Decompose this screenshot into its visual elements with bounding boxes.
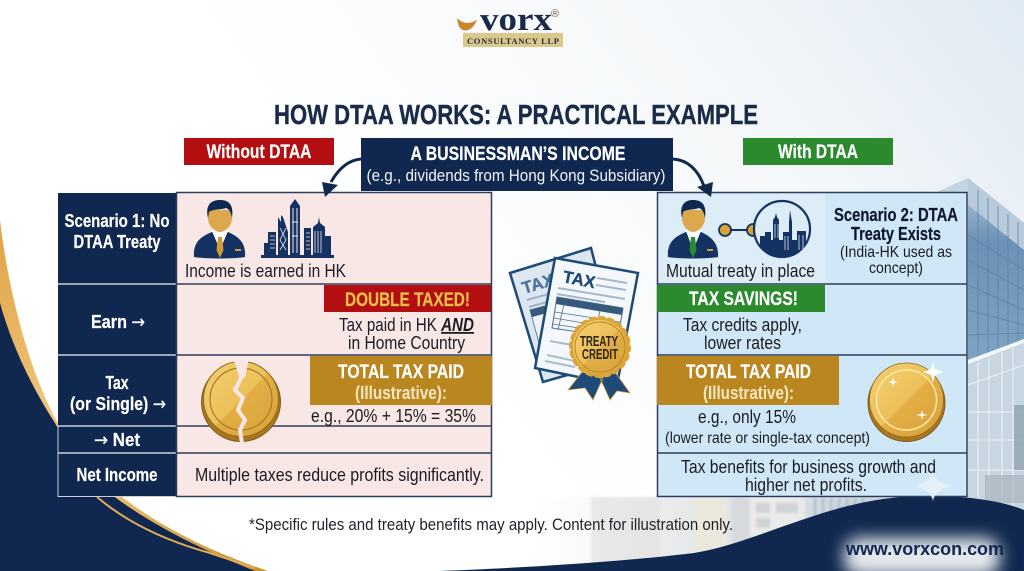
icon: businessman with green tie [668,200,718,258]
icon: shining coin [868,362,945,442]
text: tax paid in both countries: Tax paid in HK AND [339,315,474,335]
text: scenario 2 heading: Scenario 2: DTAA [834,205,958,225]
logo tagline: CONSULTANCY LLP [467,36,559,46]
banner: total tax paid: (Illustrative): [703,383,794,403]
back document: TAX [520,270,557,298]
tag: without DTAA: Without DTAA [206,142,312,163]
text: tax paid in both countries: in Home Country [348,333,465,353]
icon: businessman [194,200,245,258]
banner: total tax paid: TOTAL TAX PAID [338,362,464,383]
label: scenario 1: DTAA Treaty [74,232,160,252]
text: single tax example: e.g., only 15% [698,407,796,427]
arrow to left panel [322,159,361,197]
text: tax credits: lower rates [704,333,781,353]
label: net: → Net [94,430,140,451]
text: multiple taxes: Multiple taxes reduce profits significantly. [195,465,484,485]
panel: scenario 2 content [657,192,967,501]
website url glow and text [844,538,1004,571]
header box: businessman's income: (e.g., dividends from Hong Kong Subsidiary) [366,166,666,185]
icon: Hong Kong skyline [261,199,334,258]
text: tax benefits: higher net profits. [745,475,867,495]
logo [457,2,563,47]
text: scenario 2 heading: Treaty Exists [851,224,941,244]
arrow to right panel [673,159,713,197]
front document: TAX [561,267,598,292]
text: scenario 2 heading: (India-HK used as [840,244,952,261]
background building: lower glass tower [968,339,1024,510]
banner: total tax paid: (Illustrative): [355,383,447,403]
footnote: *Specific rules and treaty benefits may apply. Content for illustration only. [249,515,733,534]
navy wave: bottom right [440,496,1024,571]
background building: upper glass tower [937,178,1024,360]
ribbons [568,372,630,400]
website url glow and text: www.vorxcon.com [845,539,1004,559]
text: tax calculation: e.g., 20% + 15% = 35% [311,406,476,426]
decorative sparkle [915,473,952,501]
label: tax or single: Tax [106,373,128,393]
banner: double taxed [324,285,491,312]
icon: broken coin [202,358,280,443]
banner: total tax paid [657,356,839,405]
seal: TREATY [580,334,618,350]
icon: tax documents with treaty credit badge [510,248,638,400]
title: HOW DTAA WORKS: A PRACTICAL EXAMPLE [274,99,758,130]
navy corner wave: bottom left [0,220,268,571]
panel: scenario 1 content [176,192,492,496]
text: tax benefits [681,457,936,495]
tag: with DTAA: With DTAA [778,142,858,163]
label: net income: Net Income [76,465,158,485]
text: scenario 2 heading [834,205,958,277]
icon: city in circle [754,201,810,257]
label: scenario 1 [64,211,170,252]
label: earn: Earn → [91,312,145,333]
text: tax credits: Tax credits apply, [683,315,802,335]
seal: CREDIT [582,347,618,363]
header box: businessman's income: A BUSINESSMAN’S INCOME [410,144,626,165]
back document [510,248,620,382]
front document [535,258,638,385]
logo wordmark: vorx [480,2,553,38]
label: scenario 1: Scenario 1: No [64,211,170,231]
registered mark: ® [551,8,559,20]
banner: tax savings [657,285,825,312]
banner: total tax paid: TOTAL TAX PAID [686,362,811,383]
text: tax benefits: Tax benefits for business growth and [681,457,936,477]
text: single tax example: (lower rate or single-tax concept) [665,430,870,447]
label: tax or single [70,373,166,415]
banner: total tax paid [310,356,492,405]
header box: businessman's income [361,138,673,191]
tag: without DTAA [184,138,334,165]
faded city skyline behind footer [510,497,950,571]
seal [572,319,628,375]
text: tax credits [683,315,802,353]
text: tax paid in both countries [339,315,474,353]
text: mutual treaty: Mutual treaty in place [666,261,815,281]
tag: with DTAA [743,138,893,165]
text: scenario 2 heading: concept) [869,260,923,277]
icon: treaty connector [719,224,759,236]
banner: double taxed: DOUBLE TAXED! [345,290,470,311]
logo swoosh [457,18,477,30]
label: tax or single: (or Single) → [70,394,166,415]
panel: scenario 1 labels [58,193,176,497]
banner: tax savings: TAX SAVINGS! [689,289,798,310]
text: income earned in HK: Income is earned in HK [185,261,346,281]
text: single tax example [665,407,870,447]
